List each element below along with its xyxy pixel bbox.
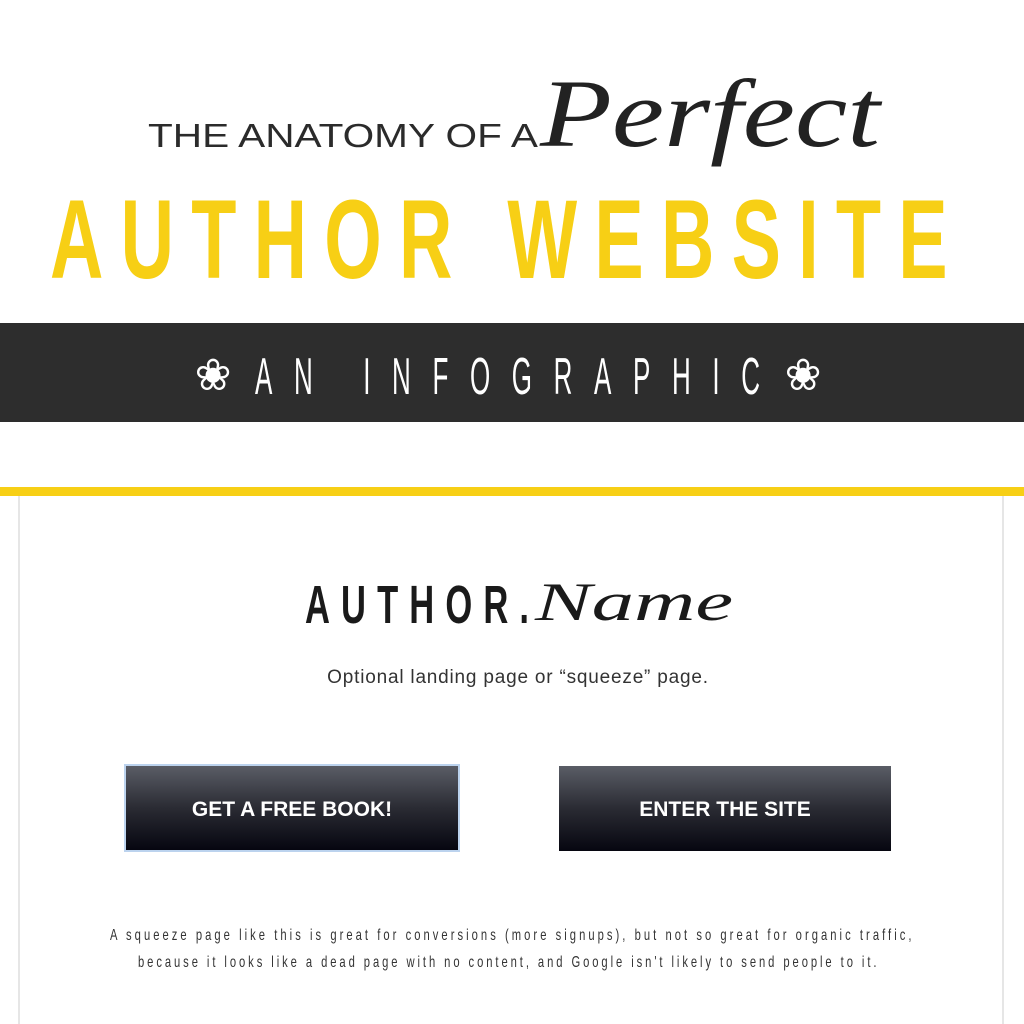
note text: A squeeze page like this is great for conversions (more signups), but not so great for organic traffic, [110, 925, 912, 943]
title: author website: AUTHOR WEBSITE [50, 178, 948, 303]
yellow divider [0, 487, 1024, 496]
title: the anatomy of a: THE ANATOMY OF A [148, 117, 538, 154]
icon: flower left: ❀ [195, 350, 231, 401]
button: enter the site [559, 766, 891, 851]
button: enter the site: ENTER THE SITE [639, 798, 811, 821]
heading: author name: AUTHOR. [305, 574, 529, 635]
note text: because it looks like a dead page with no content, and Google isn't likely to send people to it. [138, 952, 877, 970]
subtitle: Optional landing page or “squeeze” page. [327, 667, 709, 688]
heading: author name [305, 572, 733, 635]
button: get a free book: GET A FREE BOOK! [192, 798, 392, 821]
banner text: AN INFOGRAPHIC [255, 347, 760, 405]
button: get a free book [124, 764, 460, 852]
note text [110, 925, 912, 970]
title: Perfect script: Perfect [539, 60, 883, 167]
icon: flower right: ❀ [785, 350, 821, 401]
heading: author name: Name [533, 572, 733, 632]
panel: landing page mockup [19, 496, 1003, 1024]
banner: an infographic [0, 323, 1024, 422]
